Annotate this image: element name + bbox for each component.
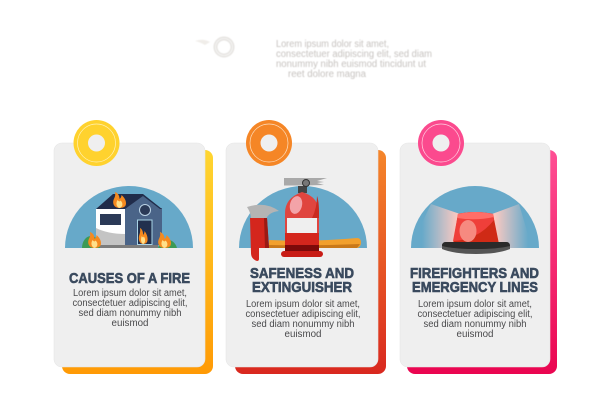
body text: [72, 288, 188, 329]
header text: nonummy nibh euismod tincidunt ut: [276, 59, 426, 70]
panel: firefighters and emergency lines: [400, 120, 557, 374]
body text: Lorem ipsum dolor sit amet,: [246, 299, 360, 310]
faded header: [195, 38, 432, 80]
header text: consectetuer adipiscing elit, sed diam: [276, 49, 432, 60]
header text: reet dolore magna: [288, 69, 366, 80]
icon: ring: [418, 120, 464, 166]
panel: causes of a fire: [54, 120, 213, 374]
header icon: [195, 38, 232, 56]
heading: EXTINGUISHER: [252, 280, 352, 296]
icon: burning house: [65, 186, 193, 248]
body text: euismod: [456, 329, 494, 340]
body text: euismod: [284, 329, 322, 340]
header text: [276, 39, 432, 80]
header text: Lorem ipsum dolor sit amet,: [276, 39, 389, 50]
card backing: [407, 150, 557, 374]
card: [400, 143, 550, 367]
card: [226, 143, 378, 367]
body text: [418, 299, 532, 340]
body text: [246, 299, 360, 340]
heading: [250, 266, 354, 296]
heading: SAFENESS AND: [250, 266, 354, 282]
body text: sed diam nonummy nibh: [78, 308, 182, 319]
heading: [410, 266, 539, 296]
card: [54, 143, 205, 367]
icon: dome, axe and extinguisher: [239, 178, 367, 261]
icon: ring: [74, 120, 120, 166]
body text: sed diam nonummy nibh: [424, 319, 526, 330]
panel: safeness and extinguisher: [226, 120, 386, 374]
body text: consectetuer adipiscing elit,: [418, 309, 532, 320]
icon: emergency beacon: [410, 186, 539, 254]
body text: Lorem ipsum dolor sit amet,: [418, 299, 532, 310]
body text: sed diam nonummy nibh: [252, 319, 354, 330]
card backing: [62, 150, 213, 374]
card backing: [235, 150, 386, 374]
body text: consectetuer adipiscing elit,: [246, 309, 360, 320]
heading: EMERGENCY LINES: [412, 280, 538, 296]
body text: Lorem ipsum dolor sit amet,: [73, 288, 187, 299]
heading: CAUSES OF A FIRE: [69, 271, 190, 287]
body text: consectetuer adipiscing elit,: [72, 298, 188, 309]
icon: ring: [246, 120, 292, 166]
heading: FIREFIGHTERS AND: [410, 266, 539, 282]
body text: euismod: [112, 318, 148, 329]
